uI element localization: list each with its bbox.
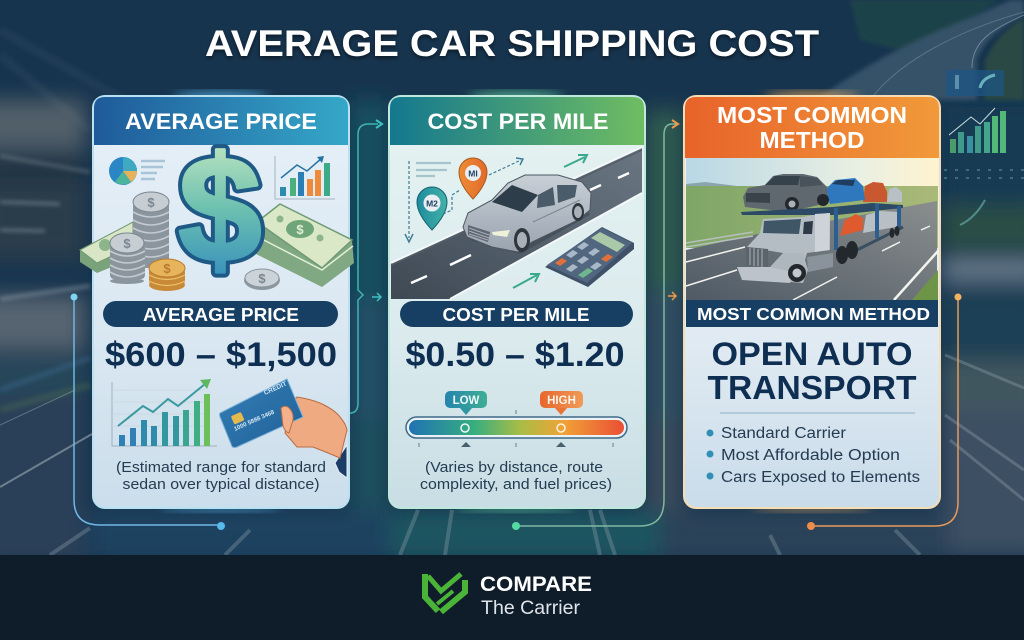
- icon: calculator: [545, 227, 634, 287]
- label pill: cost per mile: [400, 301, 633, 327]
- title: AVERAGE CAR SHIPPING COST: [205, 23, 819, 64]
- icon: hand holding credit card: CREDIT: [263, 381, 288, 397]
- footer bar: [0, 555, 1024, 640]
- high tag: HIGH: [547, 395, 576, 407]
- icon: silver sedan: [463, 175, 591, 254]
- icon: front silver coin stack: $: [123, 236, 131, 251]
- icon: single silver coin: [244, 269, 280, 290]
- label pill: average price: [103, 301, 338, 327]
- label pill: average price: AVERAGE PRICE: [143, 305, 299, 325]
- label bar: most common method: MOST COMMON METHOD: [697, 304, 930, 324]
- heading: most common method: MOST COMMON: [717, 102, 907, 128]
- value: open auto transport: TRANSPORT: [708, 369, 916, 406]
- icon: back silver coin stack: $: [147, 195, 155, 210]
- high tag: [540, 391, 583, 415]
- logo mark: [425, 574, 465, 612]
- connector: teal line between card 1 and 2: [350, 120, 382, 413]
- panel: most common method: [684, 93, 940, 510]
- photo: car carrier truck on highway: [686, 158, 938, 300]
- bullet list: Cars Exposed to Elements: [721, 469, 920, 486]
- heading: cost per mile: [390, 97, 644, 145]
- icon: hand holding credit card: 1000 5888 3468: [233, 409, 276, 433]
- heading: most common method: [685, 97, 939, 158]
- icon: front silver coin stack: [110, 233, 145, 284]
- icon: single silver coin: $: [258, 271, 266, 286]
- bullet list: Most Affordable Option: [721, 447, 900, 464]
- icon: right cash stacks: [254, 204, 354, 287]
- logo wordmark: COMPARE: [480, 573, 592, 596]
- highway curve top right: [815, 0, 1024, 100]
- icon: gold coin stack: $: [163, 261, 171, 276]
- data panel: mini chart top right: [944, 70, 1024, 225]
- heading: most common method: METHOD: [760, 127, 864, 153]
- panel: cost per mile: [389, 93, 645, 510]
- truck cab: [737, 213, 833, 283]
- icon: pie chart with legend: [109, 157, 165, 185]
- chart: low to high range slider: [406, 391, 627, 447]
- panel: average price: [80, 93, 354, 510]
- logo wordmark: The Carrier: [481, 597, 581, 619]
- icon: route dashes and arrows: [405, 155, 587, 288]
- icon: small bar chart: [275, 156, 335, 199]
- icon: map pin M2: [417, 187, 447, 230]
- value: average price: $600 – $1,500: [105, 336, 337, 374]
- low tag: [445, 391, 487, 415]
- icon: hand holding credit card: [220, 379, 347, 478]
- icon: back silver coin stack: [133, 192, 169, 268]
- icon: large dollar sign: $: [178, 125, 262, 293]
- note: cost per mile: complexity, and fuel prices): [420, 477, 612, 493]
- value: open auto transport: OPEN AUTO: [712, 336, 912, 372]
- connector: orange line card 3: [807, 294, 962, 530]
- note: cost per mile: (Varies by distance, route: [425, 460, 603, 476]
- road: [391, 147, 642, 299]
- value: open auto transport: [708, 336, 916, 406]
- icon: left cash stack: [80, 222, 133, 273]
- icon: map pin M1: MI: [468, 168, 478, 178]
- connector lines: [70, 120, 962, 530]
- connector: blue line to first card: [70, 294, 225, 530]
- heading: average price: AVERAGE PRICE: [125, 109, 317, 134]
- chart: growth bars: [112, 379, 217, 446]
- low tag: LOW: [453, 395, 480, 407]
- icon: map pin M1: [459, 158, 487, 199]
- heading: cost per mile: COST PER MILE: [428, 109, 608, 134]
- icon: map pin M2: M2: [426, 198, 438, 208]
- icon: gold coin stack: [149, 259, 185, 291]
- logo wordmark: [480, 573, 592, 619]
- bullet list: Standard Carrier: [721, 425, 846, 442]
- bullet list: [706, 425, 920, 486]
- connector: green line card 2 to 3: [512, 120, 678, 530]
- icon: large dollar sign: $: [178, 125, 262, 293]
- label bar: most common method: [686, 300, 938, 327]
- label pill: cost per mile: COST PER MILE: [442, 305, 590, 325]
- icon: right cash stacks: $: [296, 222, 304, 237]
- value: cost per mile: $0.50 – $1.20: [406, 336, 624, 374]
- note: average price: (Estimated range for standard: [116, 460, 326, 476]
- note: average price: sedan over typical distance): [122, 477, 320, 493]
- heading: average price: [94, 97, 348, 145]
- upper deck cars: [743, 174, 902, 212]
- trailer with lower cars: [741, 203, 903, 264]
